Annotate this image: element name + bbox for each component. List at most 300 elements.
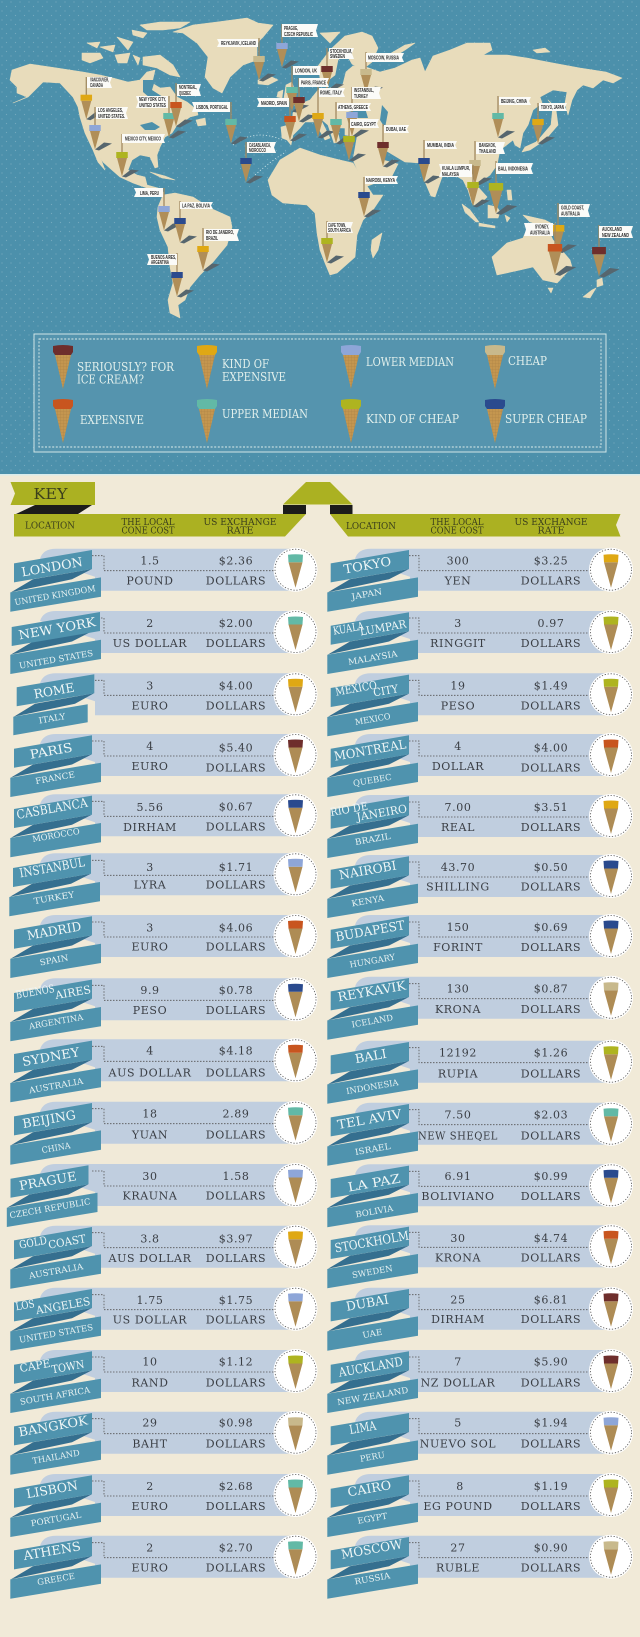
unit: DOLLARS [521,1562,581,1575]
rate: $2.03 [534,1109,568,1122]
rate: $6.81 [534,1294,568,1307]
country: UNITED KINGDOM [14,584,97,608]
rate: $4.00 [219,679,253,692]
header labels [25,517,588,536]
icon: cone [274,1287,318,1331]
map: South America [157,193,232,318]
row: Mexico City [327,672,633,736]
city: MEXICO [334,679,378,699]
city: CAIRO [346,1477,392,1500]
currency: AUS DOLLAR [108,1252,192,1265]
rate: $2.68 [219,1480,253,1493]
pin: Buenos Aires: ARGENTINA [151,260,169,266]
rate: $3.25 [534,555,568,568]
cost: 3.8 [140,1233,160,1246]
city: ANGELES [34,1295,91,1317]
unit: DOLLARS [521,1313,581,1326]
pin: Dubai: DUBAI, UAE [386,127,406,133]
rate: $4.74 [534,1232,568,1245]
rate: $1.94 [534,1417,568,1430]
unit: DOLLARS [521,880,581,894]
rate: $4.06 [219,922,253,934]
pin: Reykjavik [217,38,276,82]
icon: cone [589,1535,633,1579]
rate: 2.89 [223,1108,249,1121]
currency: RUBLE [436,1562,480,1575]
pin: Vancouver: VANCOUVER, [90,78,109,84]
country: BOLIVIA [355,1204,395,1221]
unit: DOLLARS [521,1130,581,1143]
city [329,800,408,824]
unit: DOLLARS [206,699,266,712]
row: Madrid [10,914,318,978]
pin: Montreal [170,83,201,128]
map: North America [10,64,198,198]
legend: expensive: EXPENSIVE [80,412,144,427]
row: Moscow [327,1535,633,1599]
icon: cone [274,852,318,896]
pin: Mumbai: MUMBAI, INDIA [427,143,454,149]
country: SWEDEN [351,1264,394,1281]
pin: Moscow: MOSCOW, RUSSIA [368,56,399,62]
cost: 2 [146,617,154,630]
country: SPAIN [39,953,70,968]
row: Sydney [10,1038,318,1102]
rate: $1.12 [219,1356,253,1368]
pin: Cape Town [321,221,353,264]
pin: Lisbon [192,102,248,144]
pin: Auckland: AUCKLAND [602,227,622,233]
pin: Kuala Lumpur: MALAYSIA [442,172,459,178]
icon: cone [589,976,633,1020]
unit: DOLLARS [521,1251,581,1264]
header labels: US EXCHANGE [514,517,588,528]
pin: Buenos Aires [147,253,194,298]
row: Reykjavik [327,976,633,1040]
rate: $1.19 [534,1480,568,1493]
pin: Casablanca [240,142,276,184]
pin: Sydney [524,223,576,276]
cost: 1.5 [140,555,160,568]
city: LOS [15,1297,36,1313]
currency: NEW SHEQEL [418,1130,498,1143]
icon: cone [274,977,318,1021]
city: TEL AVIV [336,1106,404,1132]
icon: cone [274,548,318,592]
cost: 4 [454,740,462,753]
country: AUSTRALIA [27,1077,85,1096]
cost: 6.91 [445,1170,471,1183]
legend: kind of cheap [341,399,459,443]
city: CITY [372,682,400,699]
city [19,1357,86,1376]
city: MOSCOW [340,1536,404,1562]
icon: cone [589,733,633,777]
header labels: THE LOCAL [122,517,175,528]
currency: BAHT [132,1438,168,1451]
icon: cone [274,1225,318,1269]
legend: kind of cheap: KIND OF CHEAP [366,411,459,426]
pin: Auckland [592,225,633,278]
pin: Stockholm: STOCKHOLM, [330,49,352,55]
currency: DIRHAM [431,1313,485,1326]
country: ISRAEL [354,1142,392,1158]
cost: 2 [146,1542,154,1555]
pin: Reykjavik: REYKJAVIK, ICELAND [221,41,256,47]
icon: cone [589,610,633,654]
currency: RINGGIT [430,637,486,650]
cost: 10 [142,1356,158,1368]
header labels: THE LOCAL [430,517,484,528]
legend: super cheap [485,399,587,443]
unit: DOLLARS [206,1376,266,1390]
row: Bangkok [10,1411,318,1475]
cost: 7 [454,1356,462,1368]
cost: 3 [146,679,154,692]
cost: 30 [142,1170,158,1183]
city: RIO DE [329,800,369,819]
cost: 27 [450,1542,466,1555]
legend: seriously [53,345,174,389]
country: AUSTRALIA [27,1262,85,1282]
city: BEIJING [21,1107,77,1131]
row: Rio de Janeiro [327,794,633,858]
pin: Tokyo: TOKYO, JAPAN [541,105,564,111]
header labels: CONE COST [122,526,175,536]
legend: kind of expensive [197,345,286,389]
unit: DOLLARS [206,1129,266,1142]
city: LONDON [20,554,84,579]
country: CZECH REPUBLIC [9,1197,91,1221]
country: PERU [359,1451,386,1465]
header labels: LOCATION [346,521,396,532]
city: KUALA [332,619,366,638]
cost: 19 [450,679,466,692]
unit: DOLLARS [521,941,581,954]
country: ICELAND [351,1013,394,1031]
unit: DOLLARS [521,1003,581,1016]
legend: kind of expensive: EXPENSIVE [222,369,286,384]
row: Tel Aviv [327,1102,633,1166]
pin: Los Angeles: LOS ANGELES, [98,108,123,114]
currency: EURO [131,699,169,712]
row: Istanbul [9,852,318,916]
cost: 43.70 [441,861,475,874]
city: INSTANBUL [18,854,86,880]
city: NAIROBI [338,858,398,882]
icon: cone [589,1349,633,1393]
icon: cone [274,914,318,958]
country: QUEBEC [352,773,393,789]
row: Dubai [327,1287,633,1351]
country: PORTUGAL [30,1511,82,1529]
pin: Casablanca: CASABLANCA, [249,143,271,149]
pin: Tokyo [532,103,567,144]
currency: KRONA [435,1003,481,1016]
pin: Nairobi [358,176,398,218]
header labels: LOCATION [25,520,75,532]
icon: cone [274,793,318,837]
unit: DOLLARS [521,699,581,712]
country: RUSSIA [354,1571,392,1587]
cost: 3 [146,861,154,874]
legend: upper median [197,399,308,443]
country: THAILAND [32,1449,81,1467]
row: Cape Town [10,1349,318,1413]
pin: Lima [134,188,181,232]
rate: $5.40 [219,742,253,754]
icon: cone [589,1040,633,1084]
city [332,617,408,638]
unit: DOLLARS [206,1562,266,1575]
row: Casablanca [10,793,318,857]
city: ATHENS [21,1538,82,1563]
currency: DIRHAM [123,821,177,834]
country: GREECE [37,1572,76,1588]
country: ITALY [38,712,67,727]
country: NEW ZEALAND [337,1386,409,1408]
row: Athens [10,1535,318,1599]
cost: 300 [447,555,469,568]
cost: 2 [146,1480,154,1493]
row: Lima [327,1411,633,1475]
pin: Bangkok [469,141,505,186]
unit: DOLLARS [521,1438,581,1451]
row: La Paz [327,1163,633,1227]
cost: 150 [447,921,469,934]
city: LIMA [348,1418,378,1437]
country: MALAYSIA [347,649,399,668]
country: BRAZIL [354,832,392,848]
header labels: RATE [538,526,565,536]
unit: DOLLARS [206,1004,266,1017]
city: PARIS [29,740,73,762]
row: Nairobi [327,854,633,918]
city: BANGKOK [17,1412,89,1439]
country: TURKEY [33,890,76,907]
legend: lower median: LOWER MEDIAN [366,354,454,369]
row: Tokyo [327,548,633,612]
cost: 8 [456,1480,464,1493]
unit: DOLLARS [521,1190,581,1203]
table header: key ribbon [10,482,620,536]
row: Stockholm [327,1224,633,1288]
country: HUNGARY [349,953,396,971]
country: MEXICO [354,712,391,728]
pin: Cairo: CAIRO, EGYPT [351,122,377,128]
pin: Sydney: AUSTRALIA [530,230,550,236]
rate: $1.75 [219,1294,253,1307]
rate: $4.00 [534,742,568,754]
pin: Auckland: NEW ZEALAND [602,233,629,239]
pin: Gold Coast: GOLD COAST, [561,206,584,212]
unit: DOLLARS [206,878,266,891]
rate: $2.36 [219,555,253,568]
icon: cone [589,794,633,838]
country: KENYA [351,894,386,909]
city: JANEIRO [355,802,408,824]
pin: Istanbul: TURKEY [354,94,368,100]
legend: lower median [341,345,454,389]
city: MONTREAL [333,736,407,764]
currency: YUAN [131,1129,168,1142]
pin: Vancouver: CANADA [90,83,103,89]
currency: PESO [133,1004,167,1017]
city: MADRID [26,919,82,943]
unit: DOLLARS [206,575,266,588]
unit: DOLLARS [206,762,266,774]
row: Prague [7,1163,318,1227]
icon: cone [274,1473,318,1517]
pin: Rio de Janeiro: BRAZIL [206,236,219,242]
cost: 5.56 [137,801,163,814]
row: Rome [13,672,318,735]
cost: 130 [447,983,469,996]
rate: $0.90 [534,1542,568,1555]
unit: DOLLARS [206,940,266,954]
legend: seriously: ICE CREAM? [77,372,144,386]
pin: Prague: CZECH REPUBLIC [284,32,313,38]
pin: Stockholm: SWEDEN [330,54,345,60]
country: UAE [362,1328,383,1341]
unit: DOLLARS [206,1066,266,1079]
icon: cone [274,672,318,716]
legend: kind of expensive: KIND OF [222,356,269,371]
cost: 7.00 [445,801,471,814]
currency: KRAUNA [123,1190,178,1202]
cost: 1.75 [137,1294,163,1307]
currency: BOLIVIANO [421,1190,495,1203]
map: Scandinavia and nearby islands [258,32,550,100]
panel: cone price legend [34,334,606,452]
pin: Montreal: QUEBEC [179,91,191,97]
pin: La Paz: LA PAZ, BOLIVIA [182,204,210,210]
country: CHINA [41,1141,72,1156]
legend: super cheap: SUPER CHEAP [505,411,587,426]
map: Australia and New Zealand [492,227,603,298]
map: Hudson Bay and lakes [140,80,163,130]
icon: cone [589,548,633,592]
pin: Kuala Lumpur: KUALA LUMPUR, [442,166,470,172]
rate: $0.69 [534,921,568,934]
unit: DOLLARS [206,1438,266,1451]
city: LISBON [25,1477,79,1501]
pin: Istanbul [346,87,381,138]
pin: New York: NEW YORK CITY, [139,97,166,103]
row: Paris [10,733,318,797]
city: LA PAZ [347,1171,402,1195]
pin: Mexico City: MEXICO CITY, MEXICO [125,136,161,142]
country: MOROCCO [32,827,81,845]
row: Montreal [327,733,633,797]
pin: Athens: ATHENS, GREECE [338,105,368,111]
row: Auckland [327,1349,633,1413]
cost: 7.50 [445,1109,471,1122]
unit: DOLLARS [206,1314,266,1327]
currency: PESO [441,699,475,712]
pin: Lima: LIMA, PERU [140,191,159,197]
city: DUBAI [345,1292,390,1314]
cost: 30 [450,1232,466,1245]
currency: POUND [126,575,174,588]
legend: cheap: CHEAP [508,353,547,368]
icon: cone [589,914,633,958]
country: SOUTH AFRICA [19,1385,92,1408]
city: BUDAPEST [334,917,406,944]
pin: Lisbon: LISBON, PORTUGAL [196,105,229,111]
country: EGYPT [357,1512,388,1527]
header labels: CONE COST [430,526,484,536]
map: dotted route near Morocco [233,135,286,175]
cost: 5 [454,1417,462,1430]
city: TOKYO [342,553,392,577]
legend: seriously: SERIOUSLY? FOR [77,359,174,374]
panel: world map [0,0,640,476]
icon: cone [274,1163,318,1207]
currency: AUS DOLLAR [108,1066,192,1079]
pin: Madrid: MADRID, SPAIN [261,101,287,107]
city: STOCKHOLM [333,1228,410,1255]
pin: Cape Town: SOUTH AFRICA [328,228,351,234]
city: AIRES [53,983,92,1002]
icon: cone [589,1224,633,1268]
row: Buenos Aires [10,977,318,1041]
pin: New York [136,96,186,138]
rate: $0.98 [219,1417,253,1430]
country: JAPAN [350,587,384,603]
pin: Los Angeles: UNITED STATES. [98,114,125,120]
rate: $3.51 [534,801,568,814]
unit: DOLLARS [206,1500,266,1513]
icon: cone [274,1535,318,1579]
icon: cone [589,854,633,898]
pin: Rio de Janeiro [197,228,239,272]
map: Africa [268,148,383,275]
rate: $0.99 [534,1170,568,1183]
city [15,982,92,1002]
pin: Los Angeles [89,107,128,150]
pin: Montreal: MONTREAL, [179,85,197,91]
pin: New York: UNITED STATES [139,103,166,109]
pin: London [286,66,320,112]
pin: Nairobi: NAIROBI, KENYA [366,178,395,184]
icon: cone [274,1038,318,1082]
pin: La Paz [174,201,213,244]
icon: cone [589,672,633,716]
unit: DOLLARS [206,1252,266,1265]
row: Bali [327,1040,633,1104]
unit: DOLLARS [206,820,266,833]
pin: Madrid [257,98,307,142]
unit: DOLLARS [521,1376,581,1390]
unit: DOLLARS [206,1190,266,1202]
currency: EURO [131,1500,169,1513]
legend: expensive [53,399,144,443]
pin: Moscow [360,52,404,94]
icon: cone [589,1102,633,1146]
pin: Bangkok: BANGKOK, [479,143,496,149]
currency: US DOLLAR [113,1314,187,1327]
row: London [10,548,318,612]
city: TOWN [51,1358,86,1376]
country: UNITED STATES [18,1323,94,1346]
rate: $4.18 [219,1044,253,1057]
pin: Athens [330,102,371,144]
row: Beijing [10,1101,318,1165]
cost: 4 [146,740,154,753]
currency: KRONA [435,1251,481,1264]
icon: cone [274,1101,318,1145]
